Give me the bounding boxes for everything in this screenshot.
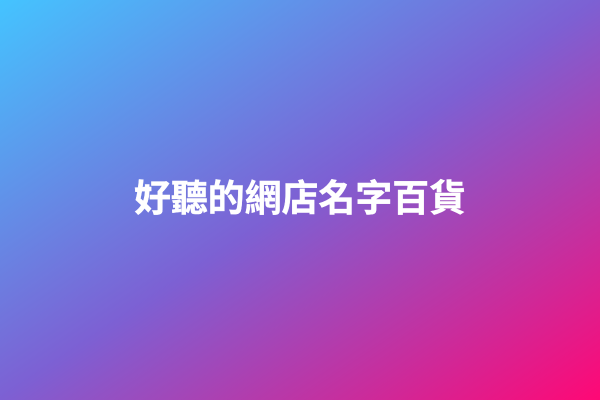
title: 好聽的網店名字百貨 xyxy=(134,178,466,219)
